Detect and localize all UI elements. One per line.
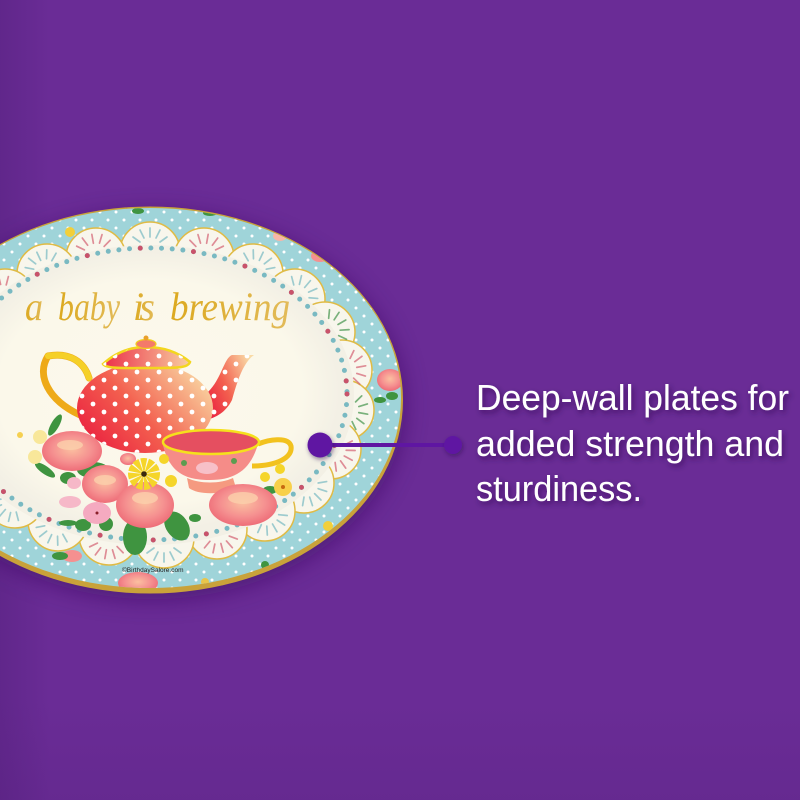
inner plate well [0, 245, 354, 545]
callout text: added strength and [476, 423, 784, 464]
teapot spout [205, 355, 254, 420]
cup rim [163, 430, 259, 454]
callout connector [308, 432, 462, 458]
plate centre [0, 252, 340, 532]
connector line [320, 443, 453, 447]
rim florals [52, 208, 403, 594]
cup handle [252, 440, 291, 466]
pink blossoms [59, 477, 111, 524]
script heading: a baby is brewing: brewing [170, 284, 290, 329]
script heading: a baby is brewing [25, 284, 290, 329]
callout text: Deep-wall plates for [476, 377, 789, 418]
blue polka-dot rim [0, 208, 401, 588]
script heading: a baby is brewing: is [133, 284, 155, 329]
leaves [33, 413, 277, 555]
plate shadow [0, 213, 404, 599]
roses [42, 431, 277, 528]
icon: teacup [163, 430, 291, 493]
illustration: flower bouquet [17, 413, 292, 555]
cup base [187, 478, 236, 493]
teapot handle [43, 355, 89, 415]
gold plate edge [0, 206, 403, 594]
small yellow flowers [17, 430, 292, 496]
end dot [444, 436, 462, 454]
script heading: a baby is brewing: a [25, 284, 43, 329]
callout text: sturdiness. [476, 468, 642, 509]
cup body [163, 440, 259, 480]
teapot body [77, 363, 213, 453]
lace scallop border [0, 222, 374, 568]
coloured dot ring [0, 248, 347, 540]
anchor dot on plate [308, 432, 332, 458]
copyright line: ©BirthdaySalore.com [122, 566, 184, 574]
cup floral decoration [181, 458, 237, 474]
rose petal highlights [57, 440, 258, 504]
teapot lid [103, 347, 190, 368]
icon: teapot [43, 336, 254, 453]
callout text [476, 377, 789, 509]
script heading: a baby is brewing: baby [58, 284, 120, 329]
lace fan details [0, 228, 371, 562]
plate [0, 206, 404, 599]
